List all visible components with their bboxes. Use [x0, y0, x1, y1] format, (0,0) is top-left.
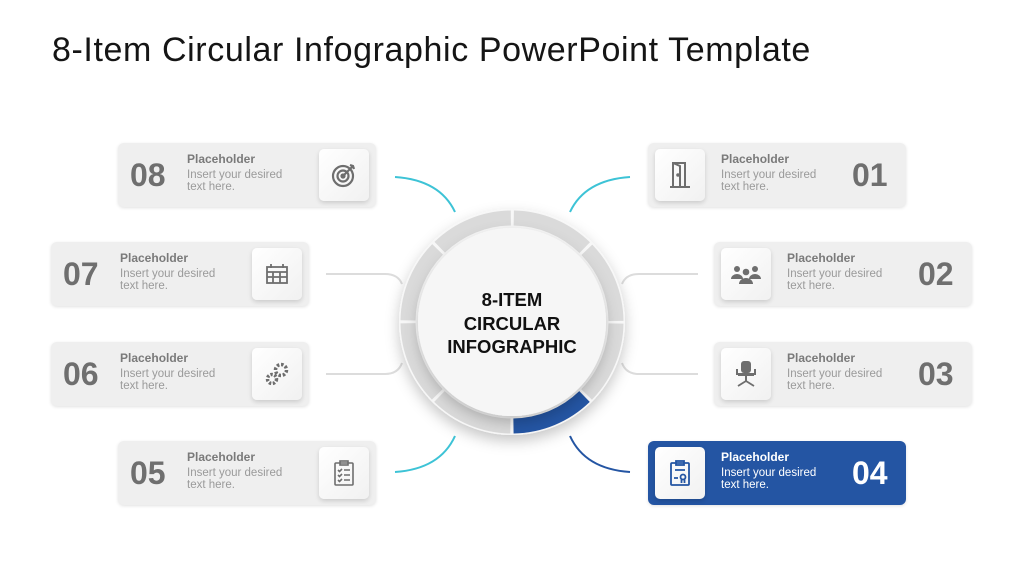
- title: 8-Item Circular Infographic PowerPoint Template: [52, 31, 811, 69]
- card 03: 03: [918, 356, 954, 392]
- card 05: Placeholder: [187, 450, 255, 464]
- card 05: [118, 441, 376, 505]
- card 05: text here.: [187, 479, 235, 491]
- card 02: 02: [918, 256, 954, 292]
- card 03: text here.: [787, 380, 835, 392]
- card 01: 01: [852, 157, 888, 193]
- card 04 (highlighted): 04: [852, 455, 888, 491]
- card 08: Insert your desired: [187, 169, 282, 181]
- icon: certificate clipboard: [670, 460, 690, 486]
- card 06: [51, 342, 309, 406]
- center text: [447, 289, 577, 357]
- card 01: Placeholder: [721, 152, 789, 166]
- card 03: Insert your desired: [787, 368, 882, 380]
- icon: chair: [736, 361, 756, 387]
- ring: [365, 175, 659, 469]
- card 05: 05: [130, 455, 166, 491]
- card 05: Insert your desired: [187, 467, 282, 479]
- card 04 (highlighted): Placeholder: [721, 450, 789, 464]
- card 01: [648, 143, 906, 207]
- card 06: Insert your desired: [120, 368, 215, 380]
- icon: checklist: [319, 447, 369, 499]
- card 03: Placeholder: [787, 351, 855, 365]
- card 06: Placeholder: [120, 351, 188, 365]
- icon: door: [670, 162, 690, 188]
- card 02: Insert your desired: [787, 268, 882, 280]
- card 08: [118, 143, 376, 207]
- card 07: Placeholder: [120, 251, 188, 265]
- card 02: [714, 242, 972, 306]
- card 04 (highlighted): text here.: [721, 479, 769, 491]
- card 04 (highlighted): [648, 441, 906, 505]
- card 04 (highlighted): Insert your desired: [721, 467, 816, 479]
- center text: INFOGRAPHIC: [447, 336, 577, 357]
- center text: 8-ITEM: [482, 289, 542, 310]
- card 02: Placeholder: [787, 251, 855, 265]
- card 06: 06: [63, 356, 99, 392]
- card 08: 08: [130, 157, 166, 193]
- card 08: Placeholder: [187, 152, 255, 166]
- icon: gears: [252, 348, 302, 400]
- card 07: text here.: [120, 280, 168, 292]
- card 07: [51, 242, 309, 306]
- card 08: text here.: [187, 181, 235, 193]
- icon: target: [319, 149, 369, 201]
- card 02: text here.: [787, 280, 835, 292]
- card 03: [714, 342, 972, 406]
- icon: calendar: [252, 248, 302, 300]
- card 06: text here.: [120, 380, 168, 392]
- card 01: Insert your desired: [721, 169, 816, 181]
- icon: people: [731, 266, 761, 284]
- card 07: 07: [63, 256, 99, 292]
- card 01: text here.: [721, 181, 769, 193]
- card 07: Insert your desired: [120, 268, 215, 280]
- connector lines: [326, 177, 698, 472]
- center text: CIRCULAR: [464, 312, 560, 334]
